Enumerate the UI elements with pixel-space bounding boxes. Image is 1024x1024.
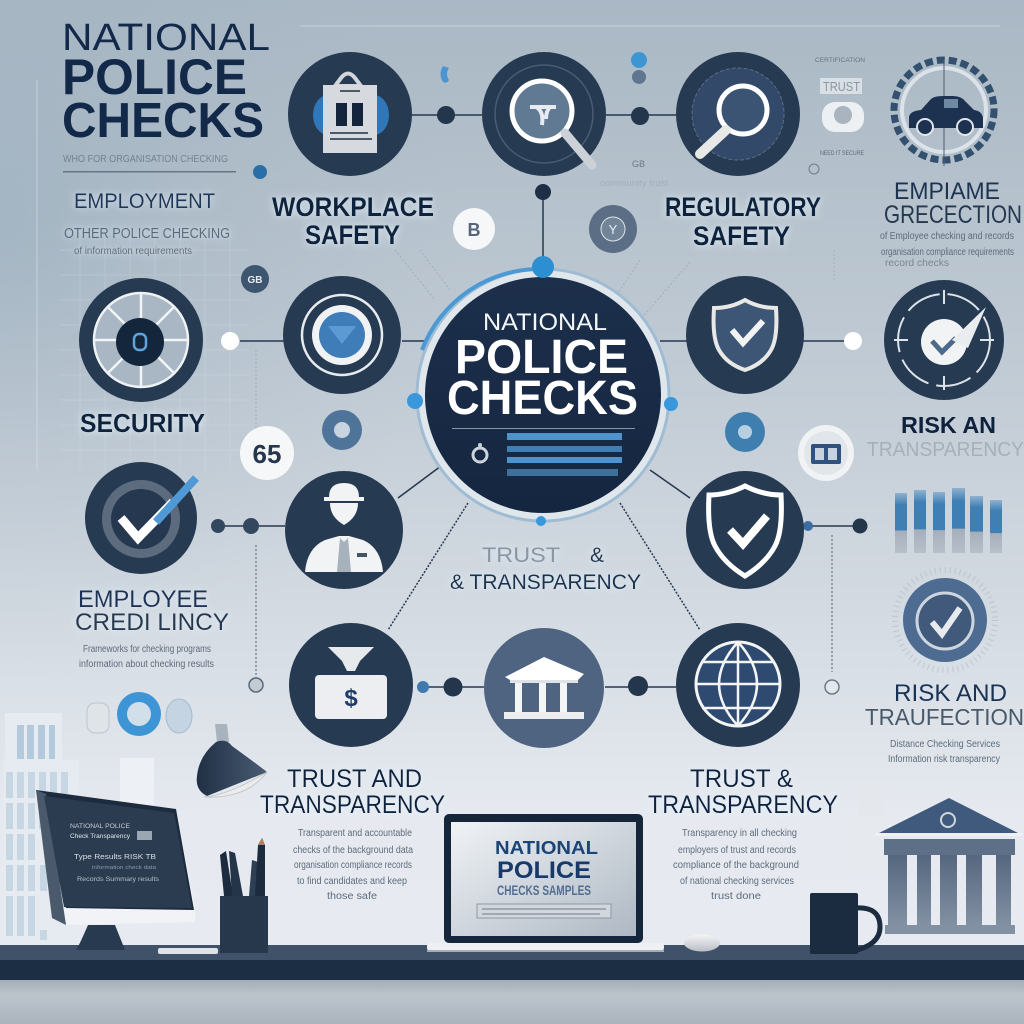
monitor: NATIONAL POLICE	[70, 824, 130, 830]
text block: employment: EMPLOYMENT	[74, 190, 215, 213]
label: regulatory safety	[665, 192, 821, 251]
label: employee credibility	[75, 586, 229, 636]
label: regulatory safety: SAFETY	[693, 221, 790, 251]
text block: trust right: employers of trust and records	[678, 845, 796, 856]
label: trust and transparency center: &	[590, 544, 604, 567]
connector dots	[211, 106, 868, 696]
label: empiame grecection: record checks	[885, 258, 949, 269]
pen cup	[220, 838, 268, 953]
text block: employment	[64, 190, 230, 257]
text block: trust left: Transparent and accountable	[298, 828, 412, 839]
small accents top: community trust	[600, 178, 669, 188]
label: security: SECURITY	[80, 408, 205, 438]
text block: trust left: to find candidates and keep	[297, 876, 407, 887]
small icons near emblem: NEED IT SECURE	[820, 151, 864, 157]
monitor: Check Transparency	[70, 833, 131, 840]
small icons near emblem: TRUST	[823, 79, 860, 94]
text block: trust left: those safe	[327, 891, 377, 902]
text block: trust left	[293, 828, 413, 902]
label: risk an transparency: RISK AN	[901, 412, 996, 438]
panel: globe icon	[676, 623, 800, 747]
panel: regulatory magnifier icon	[676, 52, 800, 176]
small badges upper middle: B	[468, 220, 480, 240]
label: workplace safety: SAFETY	[305, 220, 400, 250]
text block: trust left: organisation compliance records	[294, 860, 412, 871]
label: regulatory safety: REGULATORY	[665, 192, 821, 222]
panel: institution icon	[484, 628, 604, 748]
laptop	[427, 814, 664, 952]
monitor: Records Summary results	[77, 877, 159, 883]
panel: employee check icon	[85, 462, 197, 574]
panel: central national police checks hub: NATIONAL	[483, 309, 607, 336]
label: trust and transparency center	[450, 544, 641, 594]
text block: trust right: compliance of the background	[673, 860, 799, 871]
text block: trust right: Transparency in all checking	[682, 828, 797, 839]
small badges upper middle: GB	[248, 275, 262, 286]
panel: shield check icon	[686, 276, 804, 394]
label: risk and protection	[865, 680, 1024, 765]
label: workplace safety	[272, 192, 434, 250]
label: trust and transparency right: TRANSPARENCY	[648, 791, 838, 819]
mouse	[684, 934, 720, 952]
keyboard	[158, 948, 218, 954]
panel: security globe icon	[79, 278, 203, 402]
panel: seal check icon	[895, 570, 995, 670]
label: trust and transparency center: & TRANSPARENCY	[450, 571, 641, 594]
small icons near emblem: CERTIFICATION	[815, 58, 865, 64]
label: trust and transparency center: TRUST	[482, 544, 560, 567]
monitor: Type Results RISK TB	[74, 854, 156, 861]
label: trust and transparency right	[648, 765, 838, 819]
panel: banknote icon	[289, 623, 413, 747]
main title: POLICE	[62, 49, 247, 105]
mug	[810, 893, 880, 954]
panel: magnifier icon	[482, 52, 606, 176]
small icons near emblem	[815, 58, 865, 157]
small badges upper middle: Y	[609, 222, 618, 237]
panel: central national police checks hub: POLICE	[455, 331, 628, 384]
small accents top	[253, 52, 819, 188]
main title: NATIONAL	[62, 17, 270, 59]
label: risk and protection: TRAUFECTION	[865, 704, 1024, 730]
laptop: POLICE	[497, 857, 591, 884]
label: risk an transparency	[867, 412, 1024, 461]
text block: employment: OTHER POLICE CHECKING	[64, 225, 230, 242]
panel: workplace badge icon	[288, 52, 412, 176]
main title	[62, 17, 270, 148]
small badges mid row	[240, 410, 854, 481]
label: empiame grecection: EMPIAME	[894, 178, 1000, 205]
laptop: CHECKS SAMPLES	[497, 882, 591, 898]
label: workplace safety: WORKPLACE	[272, 192, 434, 222]
text block: employment: of information requirements	[74, 246, 192, 257]
label: trust and transparency left	[260, 765, 445, 819]
monitor	[36, 790, 195, 950]
small badges mid row: 65	[253, 439, 281, 469]
desk lamp	[197, 724, 267, 797]
panel: risk check dial icon	[884, 280, 1004, 400]
panel: central national police checks hub: CHECKS	[447, 372, 638, 425]
text block: employee notes: information about checking results	[79, 659, 214, 670]
text block: trust right: trust done	[711, 891, 761, 902]
panel: shield check large icon	[686, 471, 804, 589]
label: trust and transparency left: TRUST AND	[287, 765, 422, 793]
text block: trust right	[673, 828, 799, 902]
label: empiame grecection	[880, 178, 1022, 269]
text block: employee notes: Frameworks for checking programs	[83, 644, 211, 655]
text block: trust left: checks of the background data	[293, 845, 413, 856]
subtitle and rule: WHO FOR ORGANISATION CHECKING	[63, 154, 228, 165]
building: bank	[848, 782, 1022, 934]
laptop: NATIONAL	[495, 838, 598, 858]
panel: central national police checks hub	[407, 256, 678, 526]
emblem: car in wreath	[894, 60, 994, 166]
small pills lower left	[87, 692, 192, 736]
label: employee credibility: EMPLOYEE	[78, 586, 208, 613]
label: employee credibility: CREDI LINCY	[75, 609, 229, 636]
label: risk and protection: RISK AND	[894, 680, 1007, 707]
connectors	[225, 115, 860, 687]
desk	[0, 945, 1024, 1024]
main title: CHECKS	[62, 94, 264, 148]
panel: shield badge icon	[283, 276, 401, 394]
small badges upper middle	[241, 205, 637, 293]
small accents top: GB	[632, 159, 645, 169]
label: trust and transparency left: TRANSPARENCY	[260, 791, 445, 819]
skyline buildings	[3, 713, 154, 945]
panel: banknote icon: $	[344, 685, 358, 712]
label: risk and protection: Distance Checking Services	[890, 739, 1000, 750]
monitor: information check data	[92, 865, 157, 871]
chart: mini bar chart	[895, 488, 1002, 553]
label: risk and protection: Information risk transparency	[888, 754, 1000, 765]
panel: worker icon	[285, 471, 403, 589]
text block: trust right: of national checking services	[680, 876, 794, 887]
text block: employee notes	[79, 644, 214, 670]
label: trust and transparency right: TRUST &	[690, 765, 793, 793]
